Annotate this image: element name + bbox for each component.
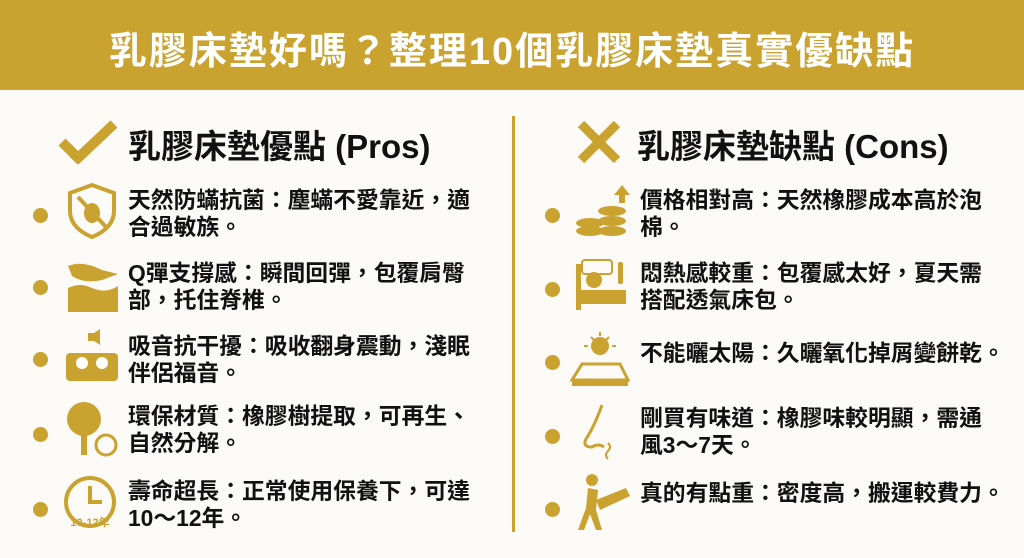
con 1: 價格相對高：天然橡膠成本高於泡棉。 [640,187,982,240]
header band [0,0,1024,90]
con 2: 悶熱感較重：包覆感太好，夏天需搭配透氣床包。 [640,260,982,313]
con 5: 真的有點重：密度高，搬運較費力。 [640,480,1005,506]
divider [512,116,515,532]
con 5 [545,474,1005,530]
con 3 [545,332,1005,386]
heading: pros: 乳膠床墊優點 (Pros) [128,128,431,165]
title: 乳膠床墊好嗎？整理10個乳膠床墊真實優缺點 [109,31,915,73]
pro 5 [33,476,470,531]
icon: X [578,120,620,164]
pros list [33,182,470,531]
pro 4: 環保材質：橡膠樹提取，可再生、自然分解。 [128,403,470,456]
pro 2: Q彈支撐感：瞬間回彈，包覆肩臀部，托住脊椎。 [128,260,465,313]
heading: cons: 乳膠床墊缺點 (Cons) [637,128,949,165]
cons list [545,185,1005,530]
pro 5: 10-12年 [70,515,110,529]
icon: check [58,120,118,164]
con 4: 剛買有味道：橡膠味較明顯，需通風3～7天。 [640,405,982,458]
con 3: 不能曬太陽：久曬氧化掉屑變餅乾。 [640,340,1005,366]
pro 1: 天然防蟎抗菌：塵蟎不愛靠近，適合過敏族。 [128,187,470,240]
pro 5: 壽命超長：正常使用保養下，可達 [128,478,470,504]
pro 5: 10～12年。 [128,505,247,531]
pro 3: 吸音抗干擾：吸收翻身震動，淺眠伴侶福音。 [128,333,470,386]
